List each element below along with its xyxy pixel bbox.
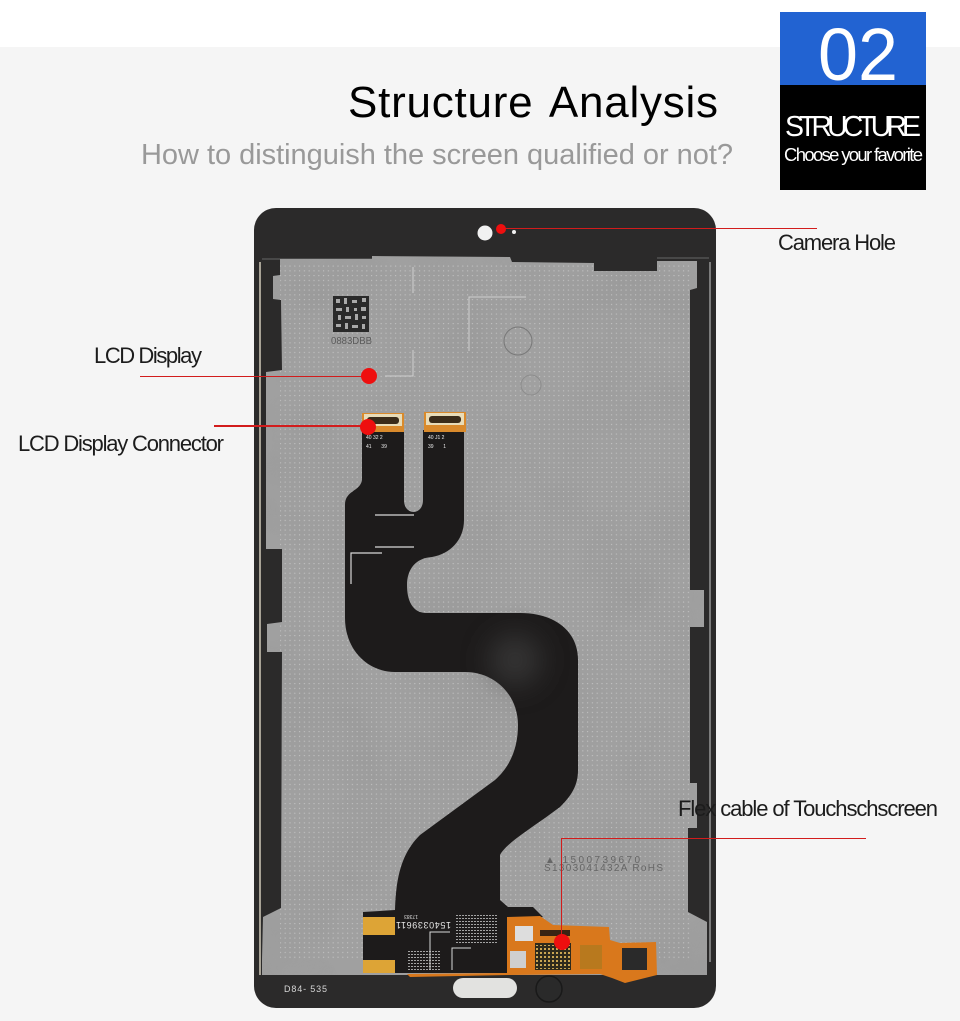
callout: LCD display connector: LCD Display Connector — [18, 431, 224, 456]
tablet screen assembly — [254, 208, 716, 1008]
plate serial text: ▲ 1500739670 — [545, 855, 640, 866]
QR code — [331, 296, 372, 347]
section badge — [780, 12, 926, 190]
speaker mesh — [536, 976, 562, 1002]
callout: LCD display connector — [18, 419, 376, 456]
right ribbon connector: 39 1 — [428, 444, 446, 450]
home button — [453, 978, 517, 998]
QR caption: 0883DBB — [331, 336, 372, 347]
callout: camera hole: Camera Hole — [778, 230, 896, 255]
right ribbon connector: 40 J1 2 — [428, 435, 445, 441]
left ribbon connector: 41 39 — [366, 444, 387, 450]
callout: LCD display: LCD Display — [94, 343, 202, 368]
model code: D84- 535 — [284, 984, 327, 994]
callout: camera hole — [496, 224, 896, 255]
plate serial text — [544, 855, 663, 874]
plate serial text: S1303041432A RoHS — [544, 863, 663, 874]
callout: flex cable of touchscreen: Flex cable of Touchschscreen — [678, 796, 938, 821]
flex board printed text: 17383 — [404, 913, 418, 919]
right ribbon connector — [424, 412, 466, 450]
plate printed marks — [385, 267, 541, 395]
left ribbon connector — [362, 413, 404, 450]
orange flex board — [363, 916, 657, 983]
badge number: 02 — [818, 13, 898, 96]
subtitle: How to distinguish the screen qualified or not? — [141, 139, 733, 171]
left ribbon connector: 40 32 2 — [366, 435, 383, 441]
flex board printed text — [396, 913, 498, 970]
metal backplate — [255, 250, 715, 980]
white cable marks — [351, 515, 414, 584]
tablet body — [254, 208, 716, 1008]
badge subheading: Choose your favorite — [784, 144, 923, 165]
callout: flex cable of touchscreen — [554, 796, 938, 950]
badge heading: STRUCTURE — [785, 111, 921, 143]
camera hole — [478, 226, 516, 240]
title: Structure Analysis — [348, 78, 718, 127]
flex board printed text: 1540339611 — [396, 920, 451, 930]
callout: LCD display — [94, 343, 377, 384]
black flex cable — [345, 430, 578, 973]
